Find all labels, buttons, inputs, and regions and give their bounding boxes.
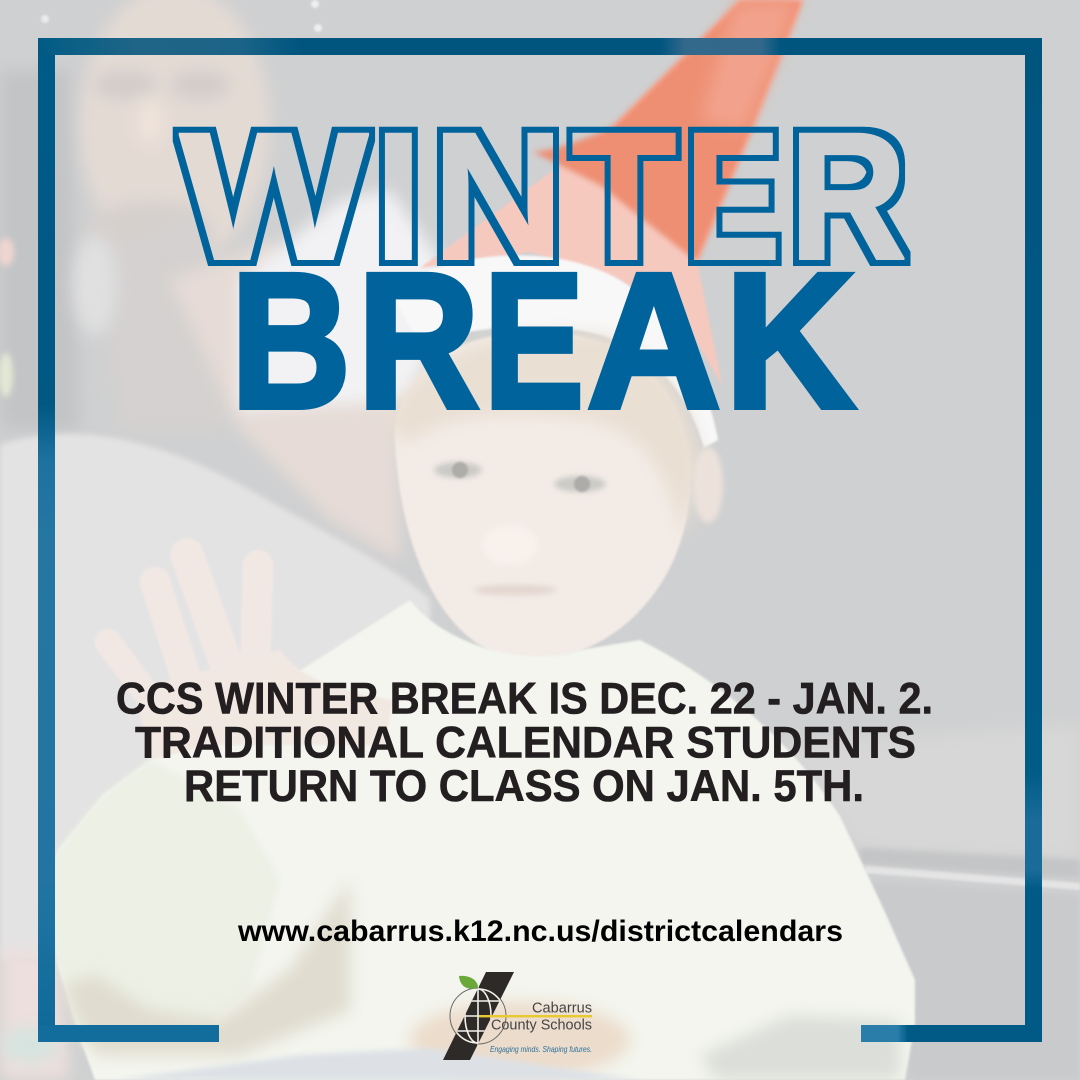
title: BREAK solid: E [484, 233, 584, 448]
body text: break dates [116, 674, 933, 811]
logo: Cabarrus County Schools [443, 972, 592, 1060]
logo mark: slanted bar with globe [443, 972, 520, 1060]
website url: www.cabarrus.k12.nc.us/districtcalendars [237, 915, 843, 948]
title: BREAK solid: B [231, 233, 351, 448]
sweatshirt [48, 600, 915, 1080]
body text: break dates: CCS WINTER BREAK IS DEC. 22 - JAN. 2. [116, 674, 933, 724]
elf hat [395, 0, 803, 448]
title: WINTER outlined: E [686, 94, 780, 298]
yellow rule [479, 1015, 592, 1017]
title: WINTER outlined: R [789, 94, 907, 298]
title: BREAK solid: R [358, 233, 479, 448]
title: BREAK solid: A [587, 233, 721, 448]
body text: break dates: TRADITIONAL CALENDAR STUDENTS [135, 718, 916, 768]
body text: break dates: RETURN TO CLASS ON JAN. 5TH. [184, 762, 864, 811]
title: WINTER outlined: N [432, 94, 564, 298]
waving hand [108, 555, 393, 760]
floor and bench at right [780, 725, 1080, 1080]
title: WINTER outlined: I [374, 94, 422, 298]
logo text: Cabarrus [532, 1000, 592, 1016]
tagline: Engaging minds. Shaping futures. [490, 1044, 592, 1054]
girl's knee and trousers [0, 434, 430, 960]
logo: Cabarrus County Schools: County Schools [491, 1018, 592, 1034]
icon: green leaf [459, 976, 478, 989]
boy's face [388, 332, 723, 660]
title: BREAK solid: K [725, 233, 855, 448]
title: WINTER outlined: W [179, 94, 369, 298]
title: WINTER outlined: T [572, 94, 676, 298]
girl in background [0, 0, 440, 560]
